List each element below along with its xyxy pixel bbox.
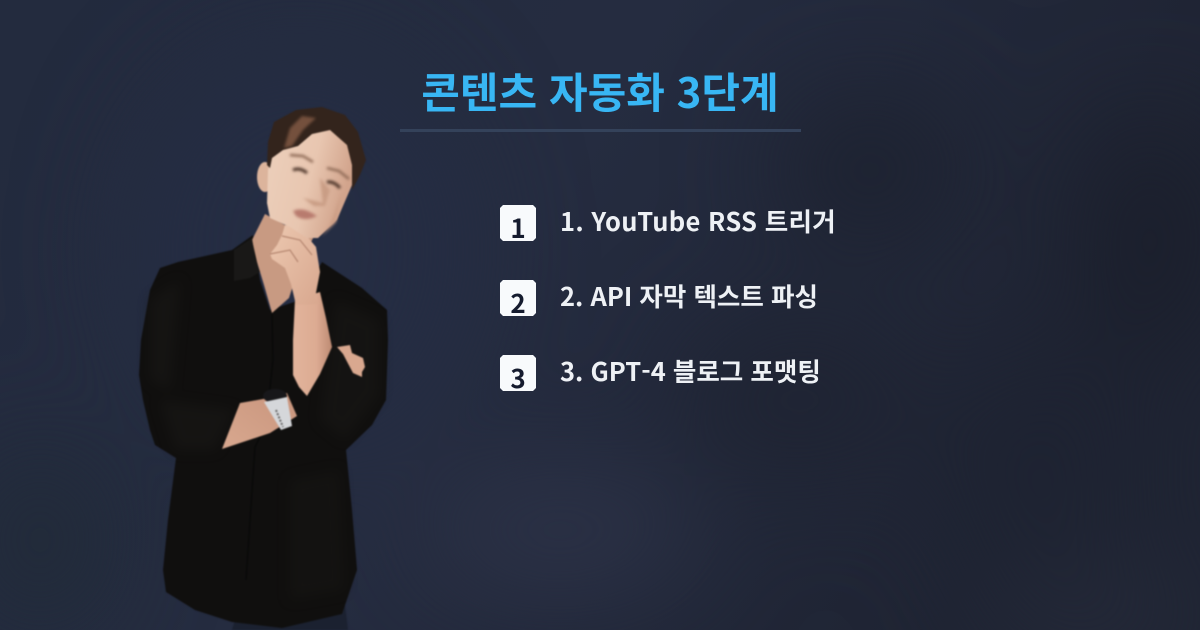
black shirt: [139, 235, 388, 628]
title: 콘텐츠 자동화 3단계: [421, 60, 779, 121]
wrist watch: [263, 389, 292, 430]
badge 1: [500, 205, 536, 241]
badge 3: 3: [510, 359, 526, 396]
skin: neck and chest: [252, 214, 314, 313]
face: [267, 122, 353, 238]
step 3: [500, 352, 821, 391]
step 2: [500, 277, 818, 316]
hand at chin: [270, 225, 320, 305]
badge 3: [500, 355, 536, 391]
hair: [267, 107, 366, 190]
facial features: [290, 155, 349, 236]
step 3 label: 3. GPT-4 블로그 포맷팅: [560, 352, 821, 389]
jeans at hem: [232, 605, 348, 630]
right-hand fingers: [337, 345, 365, 377]
collar: [234, 238, 260, 281]
placket line: [246, 314, 273, 580]
shirt soft folds: [150, 280, 380, 600]
ear: [257, 162, 273, 192]
hair highlight: [284, 116, 316, 148]
step 2 label: 2. API 자막 텍스트 파싱: [560, 277, 818, 314]
title underline: [400, 129, 801, 132]
badge 2: 2: [510, 284, 526, 321]
lower forearm: [222, 393, 297, 449]
raised forearm: [293, 292, 332, 396]
finger lines: [270, 236, 312, 262]
step 1: [500, 202, 836, 241]
badge 2: [500, 280, 536, 316]
step 1 label: 1. YouTube RSS 트리거: [560, 202, 836, 239]
badge 1: 1: [510, 209, 526, 246]
